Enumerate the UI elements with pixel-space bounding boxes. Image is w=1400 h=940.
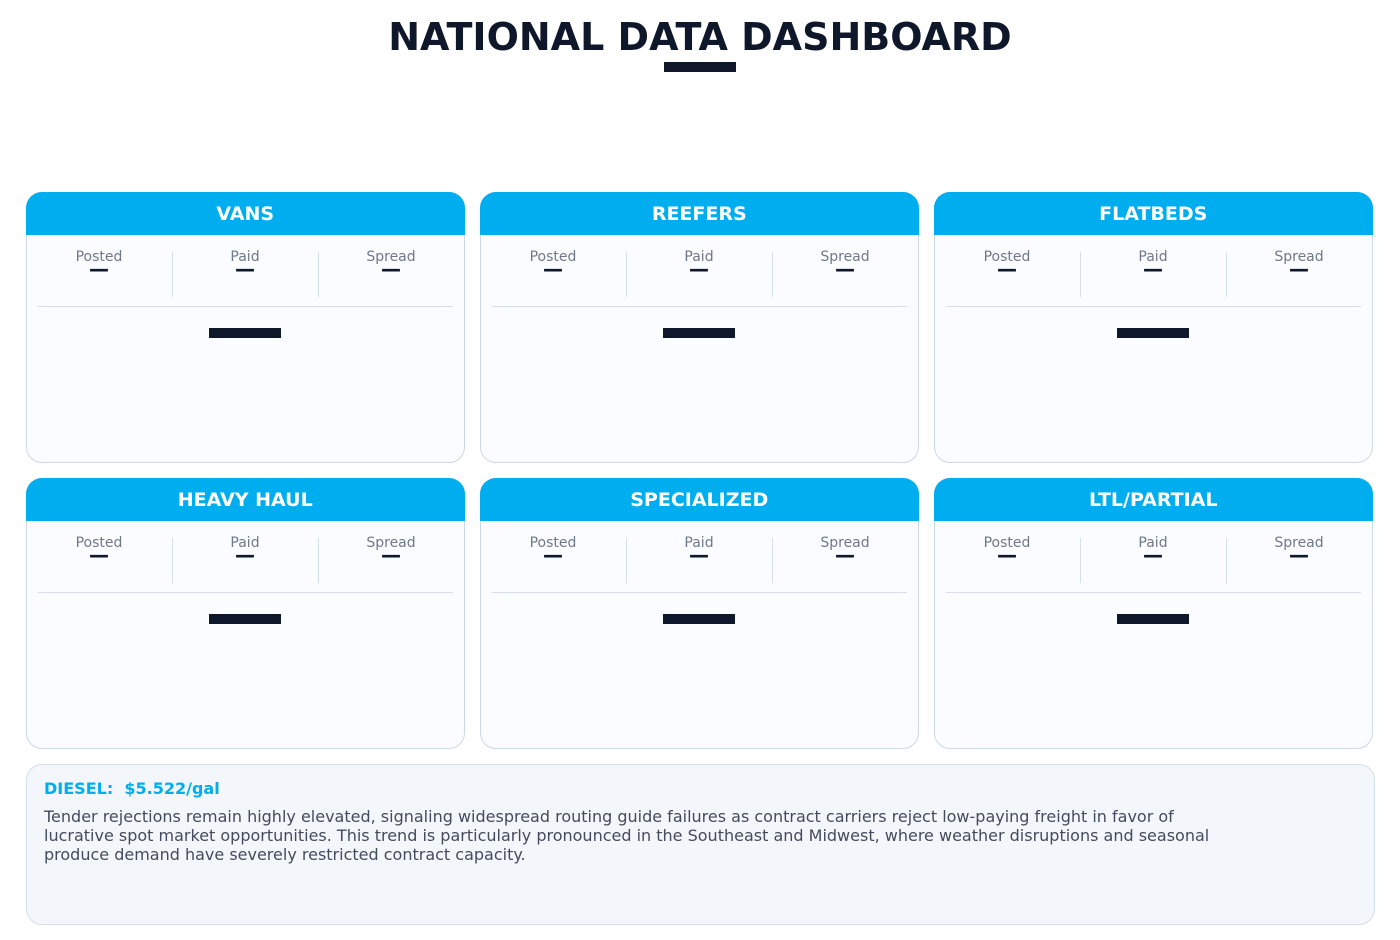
title: NATIONAL DATA DASHBOARD	[388, 15, 1012, 59]
panel: specialized	[480, 478, 919, 749]
heading: ltl/partial	[934, 478, 1373, 521]
stat value: paid: —	[1143, 257, 1163, 281]
stat value: posted: —	[997, 543, 1017, 567]
stat value: spread: —	[381, 257, 401, 281]
diesel price: DIESEL: $5.522/gal	[44, 779, 220, 798]
stat: paid: Paid	[684, 535, 714, 551]
stat value: posted: —	[543, 543, 563, 567]
stat: posted: Posted	[76, 249, 122, 265]
stat value: paid: —	[689, 543, 709, 567]
stat: paid: Paid	[1138, 535, 1168, 551]
stat: posted: Posted	[530, 249, 576, 265]
main value	[1117, 614, 1189, 624]
stat: paid: Paid	[230, 249, 260, 265]
stat value: spread: —	[381, 543, 401, 567]
stat value: posted: —	[89, 257, 109, 281]
heading: specialized: SPECIALIZED	[630, 489, 768, 511]
stat value: spread: —	[1289, 543, 1309, 567]
stat: posted: Posted	[984, 249, 1030, 265]
heading: heavy haul: HEAVY HAUL	[178, 489, 313, 511]
stat value: posted: —	[543, 257, 563, 281]
heading: vans	[26, 192, 465, 235]
stat: spread: Spread	[366, 535, 416, 551]
commentary text: Tender rejections remain highly elevated, signaling widespread routing guide failures as contract carriers reject low-paying freight in favor of	[44, 807, 1174, 826]
heading: heavy haul	[26, 478, 465, 521]
stat: posted: Posted	[984, 535, 1030, 551]
panel: ltl/partial	[934, 478, 1373, 749]
stat value: paid: —	[235, 257, 255, 281]
heading: flatbeds: FLATBEDS	[1099, 203, 1207, 225]
panel: heavy haul	[26, 478, 465, 749]
stat value: spread: —	[1289, 257, 1309, 281]
stat value: posted: —	[997, 257, 1017, 281]
stat: spread: Spread	[1274, 535, 1324, 551]
stat: spread: Spread	[820, 249, 870, 265]
panel: diesel summary	[26, 764, 1375, 925]
main value	[1117, 328, 1189, 338]
title underline	[664, 62, 736, 72]
stat: posted: Posted	[76, 535, 122, 551]
stat: spread: Spread	[366, 249, 416, 265]
stat value: posted: —	[89, 543, 109, 567]
stat: paid: Paid	[230, 535, 260, 551]
heading: reefers: REEFERS	[652, 203, 747, 225]
heading: vans: VANS	[216, 203, 274, 225]
main value	[209, 614, 281, 624]
stat: paid: Paid	[684, 249, 714, 265]
stat value: paid: —	[689, 257, 709, 281]
heading: reefers	[480, 192, 919, 235]
commentary text	[44, 807, 1209, 864]
stat: spread: Spread	[1274, 249, 1324, 265]
commentary text: produce demand have severely restricted contract capacity.	[44, 845, 526, 864]
panel: flatbeds	[934, 192, 1373, 463]
stat: spread: Spread	[820, 535, 870, 551]
stat value: paid: —	[1143, 543, 1163, 567]
stat value: spread: —	[835, 257, 855, 281]
heading: specialized	[480, 478, 919, 521]
stat: paid: Paid	[1138, 249, 1168, 265]
stat: posted: Posted	[530, 535, 576, 551]
heading: flatbeds	[934, 192, 1373, 235]
stat value: spread: —	[835, 543, 855, 567]
main value	[663, 614, 735, 624]
commentary text: lucrative spot market opportunities. This trend is particularly pronounced in the Southeast and Midwest, where weather disruptions and seasonal	[44, 826, 1209, 845]
panel: reefers	[480, 192, 919, 463]
heading: ltl/partial: LTL/PARTIAL	[1089, 489, 1217, 511]
stat value: paid: —	[235, 543, 255, 567]
panel: vans	[26, 192, 465, 463]
main value	[663, 328, 735, 338]
main value	[209, 328, 281, 338]
